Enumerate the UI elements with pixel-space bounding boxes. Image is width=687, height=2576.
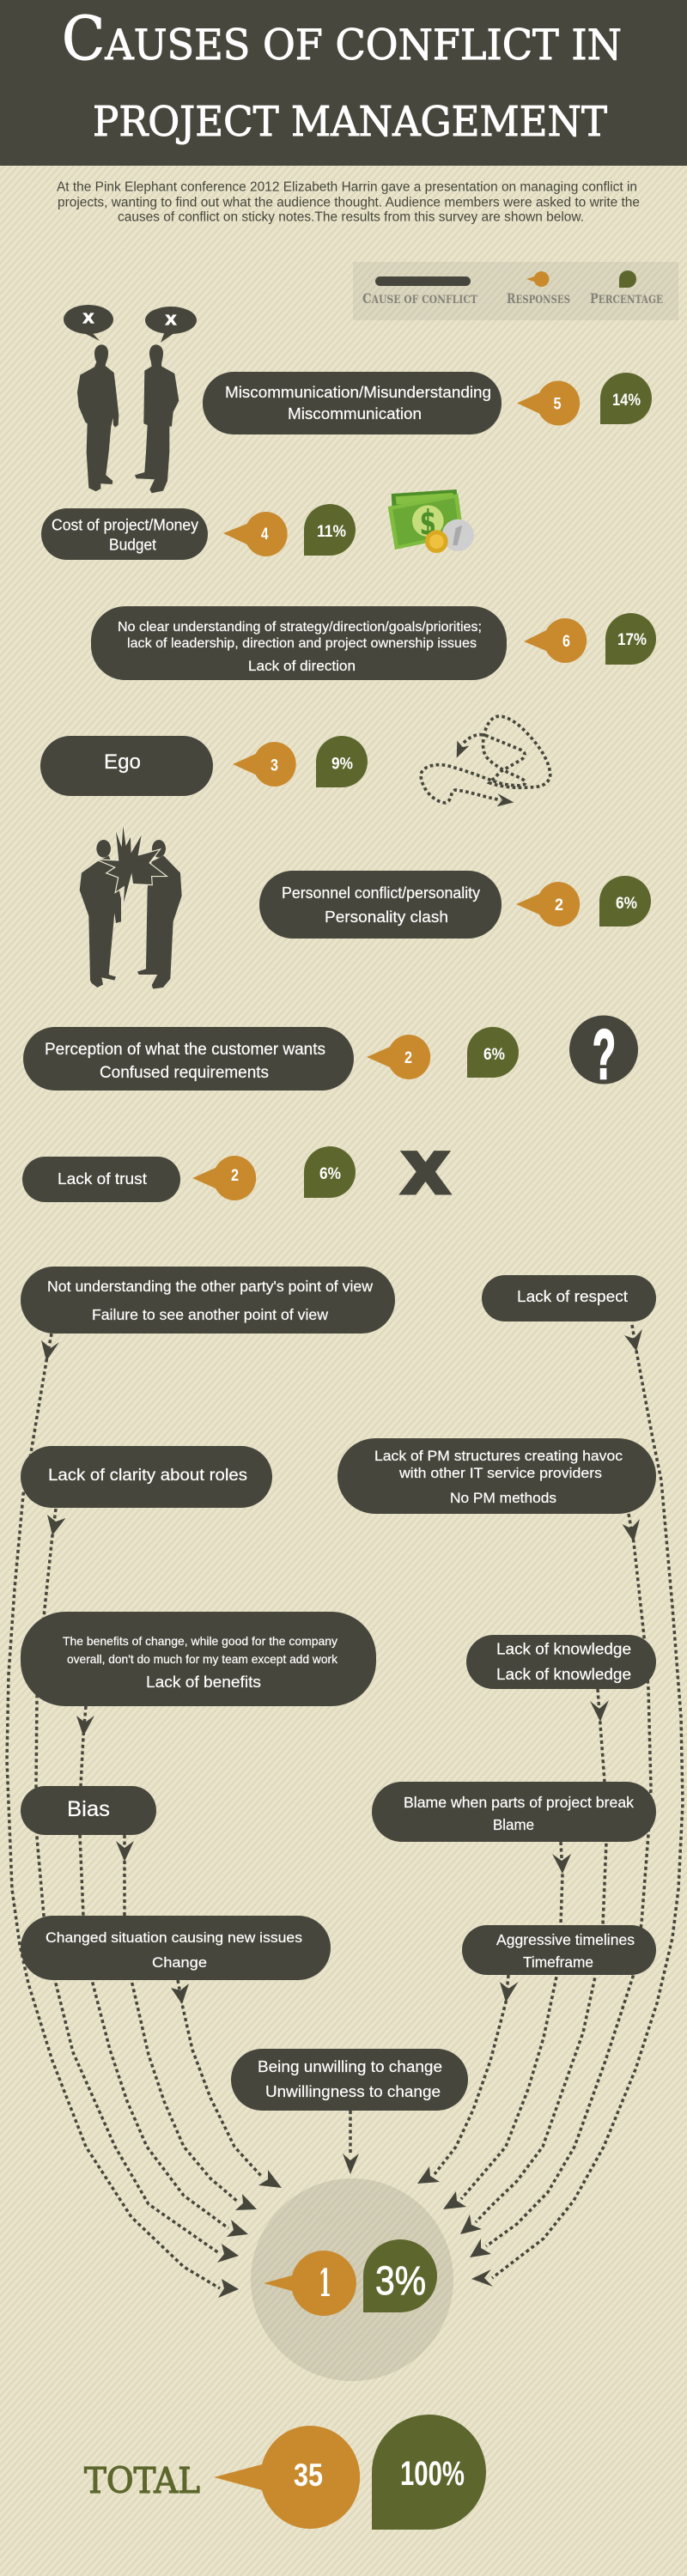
cause 3: lack of direction: No clear understanding of strategy/direction/goals/priorities; (118, 620, 482, 635)
cause: bias (21, 1786, 156, 1835)
cause: blame: Blame (493, 1816, 534, 1833)
cause 4: ego: Ego (104, 750, 141, 774)
cause 1: miscommunication (203, 372, 652, 434)
cause 3: lack of direction: Lack of direction (248, 658, 356, 674)
icon: money and coins (388, 489, 474, 553)
cause: lack of benefits: overall, don't do much for my team except add work (67, 1652, 338, 1666)
cause 2: budget: Cost of project/Money (52, 517, 198, 534)
cause: timeframe (462, 1925, 656, 1975)
header banner with title: PROJECT MANAGEMENT (93, 98, 607, 146)
icon: large X: X (404, 1140, 447, 1204)
cause 2: budget: 11% (317, 523, 346, 541)
cause: change: Changed situation causing new issues (46, 1929, 302, 1946)
cause 3: lack of direction: 6 (562, 633, 570, 651)
cause 1: miscommunication: Miscommunication/Misunderstanding (225, 384, 491, 401)
cause: lack of clarity about roles (21, 1446, 272, 1508)
cause 6: confused requirements: 2 (404, 1049, 412, 1067)
cause: change: Change (152, 1954, 207, 1971)
cause: unwillingness to change: Unwillingness to change (265, 2083, 441, 2100)
legend: CAUSE OF CONFLICT (362, 290, 477, 307)
intro text: causes of conflict on sticky notes.The results from this survey are shown below. (118, 210, 584, 225)
icon: question mark (569, 1015, 638, 1094)
intro text: At the Pink Elephant conference 2012 Elizabeth Harrin gave a presentation on managing conflict in (57, 180, 637, 195)
cause: unwillingness to change: Being unwilling to change (258, 2058, 442, 2075)
cause 4: ego: 9% (331, 756, 353, 773)
total row: TOTAL (84, 2460, 200, 2501)
cause 5: personality clash: Personality clash (325, 908, 448, 926)
cause: lack of knowledge: Lack of knowledge (496, 1640, 631, 1657)
icon: two men with speech bubbles: X (166, 313, 176, 328)
cause: lack of respect: Lack of respect (517, 1287, 628, 1305)
cause: no PM methods (337, 1438, 656, 1514)
icon: two men clashing (80, 826, 182, 989)
intro text: projects, wanting to find out what the audience thought. Audience members were asked to write the (58, 196, 640, 210)
cause: lack of clarity about roles: Lack of clarity about roles (48, 1466, 247, 1485)
cause 4: ego (40, 736, 368, 796)
cause: lack of respect (482, 1275, 656, 1321)
intro text (57, 180, 640, 225)
total row: 35 (294, 2458, 323, 2493)
cause: change (21, 1916, 331, 1980)
cause: lack of benefits: Lack of benefits (146, 1674, 261, 1691)
cause 2: budget: 4 (261, 526, 269, 544)
total row: 100% (400, 2455, 465, 2493)
cause 7: lack of trust: 6% (319, 1165, 341, 1183)
cause: blame: Blame when parts of project break (404, 1794, 634, 1811)
cause: blame (372, 1782, 656, 1842)
legend (353, 262, 678, 320)
cause 6: confused requirements: Perception of what the customer wants (45, 1041, 325, 1059)
cause: timeframe: Aggressive timelines (496, 1931, 635, 1948)
icon: two men with speech bubbles (64, 305, 197, 493)
icon: tangled dotted arrow (421, 716, 550, 806)
icon: question mark: ? (593, 1016, 616, 1094)
cause: lack of knowledge: Lack of knowledge (496, 1665, 631, 1683)
centre circle with responses and percentage: 1 (319, 2262, 331, 2306)
icon: money and coins: $ (420, 504, 436, 544)
cause 3: lack of direction: 17% (617, 631, 647, 649)
cause 2: budget (41, 504, 356, 560)
total row (84, 2415, 486, 2530)
centre circle with responses and percentage: 3% (375, 2257, 426, 2303)
cause: lack of benefits (21, 1612, 376, 1706)
cause 3: lack of direction: lack of leadership, direction and project ownership issues (127, 636, 477, 651)
cause 6: confused requirements (23, 1027, 519, 1091)
cause 1: miscommunication: 5 (553, 395, 562, 414)
centre circle with responses and percentage (251, 2178, 453, 2381)
dotted connector arrows converging on the centre circle (7, 1325, 683, 2298)
cause 5: personality clash: 6% (616, 895, 637, 913)
cause 5: personality clash: Personnel conflict/personality (282, 884, 480, 902)
cause 1: miscommunication: 14% (612, 392, 641, 410)
cause 5: personality clash (259, 871, 651, 939)
cause: no PM methods: with other IT service providers (398, 1465, 602, 1481)
cause: bias: Bias (67, 1797, 110, 1821)
cause 1: miscommunication: Miscommunication (288, 405, 422, 422)
cause: timeframe: Timeframe (523, 1953, 593, 1971)
cause: no PM methods: No PM methods (450, 1490, 556, 1506)
cause: failure to see another point of view: Not understanding the other party's point of view (47, 1278, 373, 1295)
cause: failure to see another point of view (21, 1267, 395, 1334)
legend: RESPONSES (507, 290, 570, 307)
cause 5: personality clash: 2 (555, 896, 563, 914)
legend: PERCENTAGE (590, 290, 663, 307)
cause: unwillingness to change (231, 2049, 468, 2111)
cause 4: ego: 3 (271, 757, 278, 775)
cause 2: budget: Budget (109, 536, 156, 553)
cause: lack of knowledge (466, 1635, 656, 1689)
cause 7: lack of trust (22, 1146, 356, 1202)
cause 6: confused requirements: 6% (483, 1046, 505, 1064)
cause 3: lack of direction (91, 606, 656, 680)
cause 6: confused requirements: Confused requirements (100, 1064, 269, 1082)
icon: two men with speech bubbles: X (83, 312, 94, 326)
cause: no PM methods: Lack of PM structures creating havoc (374, 1448, 623, 1464)
cause 7: lack of trust: Lack of trust (58, 1170, 147, 1188)
header banner with title: CAUSES OF CONFLICT IN (62, 3, 622, 74)
header banner with title (0, 0, 687, 166)
cause: failure to see another point of view: Failure to see another point of view (92, 1306, 328, 1323)
cause: lack of benefits: The benefits of change, while good for the company (63, 1634, 337, 1648)
cause 7: lack of trust: 2 (231, 1167, 239, 1185)
